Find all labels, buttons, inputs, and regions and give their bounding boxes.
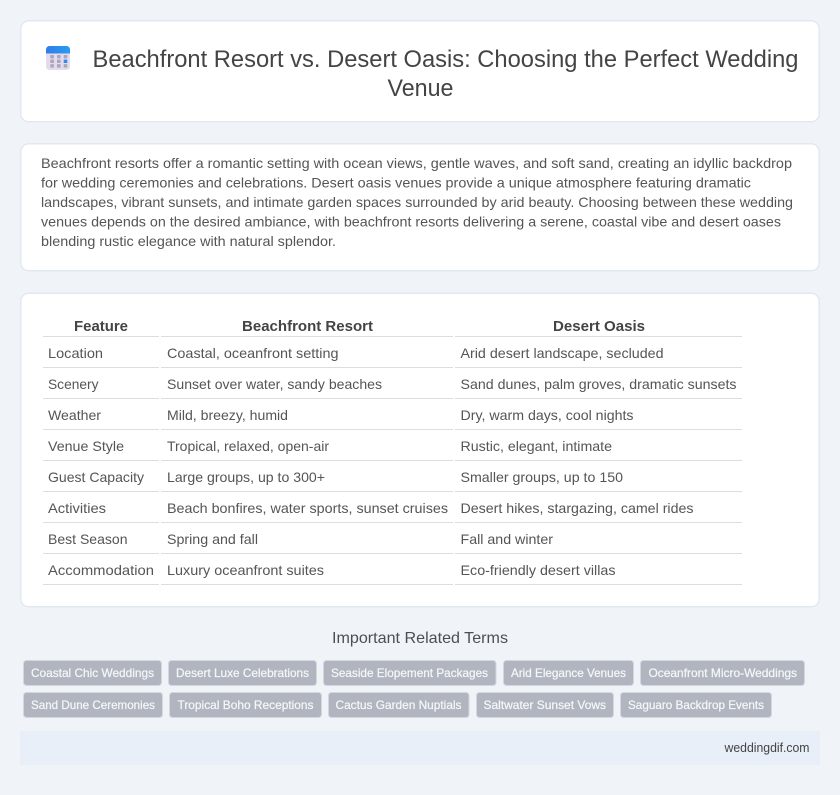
footer bar <box>20 731 820 765</box>
table row: guest capacity <box>43 469 742 492</box>
text block: intro: Beachfront resorts offer a romantic setting with ocean views, gentle waves, and soft sand, creating an idyllic backdrop <box>41 155 792 171</box>
tag: Oceanfront Micro-Weddings: Oceanfront Micro-Weddings <box>648 666 797 680</box>
text block: intro: venues depends on the desired ambiance, with beachfront resorts delivering a serene, coastal vibe and desert oases <box>41 214 781 230</box>
table header row: Feature <box>74 318 128 335</box>
tag: Desert Luxe Celebrations: Desert Luxe Celebrations <box>176 666 309 680</box>
table row: activities <box>43 500 742 523</box>
table row: activities: Desert hikes, stargazing, camel rides <box>460 500 694 516</box>
tag: Saltwater Sunset Vows <box>476 692 614 718</box>
text block: intro <box>41 155 793 249</box>
title: Beachfront Resort vs. Desert Oasis: Choosing the Perfect Wedding <box>92 46 798 73</box>
table header row: Desert Oasis <box>553 318 645 335</box>
table row: guest capacity: Guest Capacity <box>48 469 144 485</box>
table row: best season <box>43 531 742 554</box>
table row: best season: Spring and fall <box>167 531 258 547</box>
table row: accommodation <box>43 562 742 585</box>
tag: Arid Elegance Venues: Arid Elegance Venues <box>511 666 626 680</box>
footer source text: weddingdif.com <box>724 741 810 755</box>
table row: scenery: Sunset over water, sandy beaches <box>167 376 382 392</box>
table row: scenery: Scenery <box>48 376 98 392</box>
table row: weather <box>43 407 742 430</box>
table row: activities: Activities <box>48 500 106 516</box>
panel: comparison table <box>21 293 819 607</box>
tag: Arid Elegance Venues <box>504 660 634 686</box>
table row: best season: Best Season <box>48 531 128 547</box>
related terms tags <box>24 660 804 718</box>
tag: Tropical Boho Receptions: Tropical Boho Receptions <box>178 698 314 712</box>
table header row <box>43 318 742 337</box>
icon: calendar <box>46 46 70 70</box>
table row: location: Coastal, oceanfront setting <box>167 345 338 361</box>
title <box>92 46 798 102</box>
table row: scenery: Sand dunes, palm groves, dramatic sunsets <box>460 376 736 392</box>
header panel <box>21 21 819 122</box>
heading: important related terms: Important Related Terms <box>332 630 508 647</box>
tag: Cactus Garden Nuptials: Cactus Garden Nuptials <box>336 698 462 712</box>
tag: Saltwater Sunset Vows: Saltwater Sunset Vows <box>484 698 606 712</box>
table row: weather: Dry, warm days, cool nights <box>460 407 634 423</box>
table row: location: Location <box>48 345 103 361</box>
tag: Saguaro Backdrop Events <box>620 692 772 718</box>
tag: Oceanfront Micro-Weddings <box>640 660 804 686</box>
table row: best season: Fall and winter <box>460 531 553 547</box>
tag: Tropical Boho Receptions <box>170 692 322 718</box>
table row: weather: Weather <box>48 407 101 423</box>
tag: Desert Luxe Celebrations <box>168 660 316 686</box>
table row: venue style <box>43 438 742 461</box>
table row: scenery <box>43 376 742 399</box>
table header row: Beachfront Resort <box>242 318 373 335</box>
tag: Coastal Chic Weddings: Coastal Chic Weddings <box>31 666 154 680</box>
table row: guest capacity: Large groups, up to 300+ <box>167 469 325 485</box>
tag: Sand Dune Ceremonies <box>24 692 162 718</box>
table row: venue style: Venue Style <box>48 438 124 454</box>
table row: accommodation: Eco-friendly desert villas <box>460 562 616 578</box>
table row: location <box>43 345 742 368</box>
table row: activities: Beach bonfires, water sports, sunset cruises <box>167 500 448 516</box>
tag: Coastal Chic Weddings <box>24 660 162 686</box>
text block: intro: for wedding ceremonies and celebrations. Desert oasis venues provide a unique atmosphere featuring dramatic <box>41 174 751 190</box>
table row: venue style: Rustic, elegant, intimate <box>460 438 612 454</box>
table row: location: Arid desert landscape, secluded <box>460 345 664 361</box>
tag: Sand Dune Ceremonies: Sand Dune Ceremonies <box>31 698 155 712</box>
table row: venue style: Tropical, relaxed, open-air <box>167 438 329 454</box>
tag: Saguaro Backdrop Events: Saguaro Backdrop Events <box>628 698 764 712</box>
tag: Cactus Garden Nuptials <box>328 692 469 718</box>
tag: Seaside Elopement Packages <box>324 660 496 686</box>
tag: Seaside Elopement Packages: Seaside Elopement Packages <box>331 666 488 680</box>
table row: weather: Mild, breezy, humid <box>167 407 288 423</box>
title: Venue <box>388 75 454 102</box>
table row: guest capacity: Smaller groups, up to 150 <box>460 469 623 485</box>
table row: accommodation: Luxury oceanfront suites <box>167 562 324 578</box>
table row: accommodation: Accommodation <box>48 562 154 578</box>
text block: intro: landscapes, vibrant sunsets, and intimate garden spaces surrounded by arid beauty. Choosing between these wedding <box>41 194 793 210</box>
text block: intro: blending rustic elegance with natural splendor. <box>41 233 336 249</box>
panel: intro paragraph <box>21 144 819 271</box>
